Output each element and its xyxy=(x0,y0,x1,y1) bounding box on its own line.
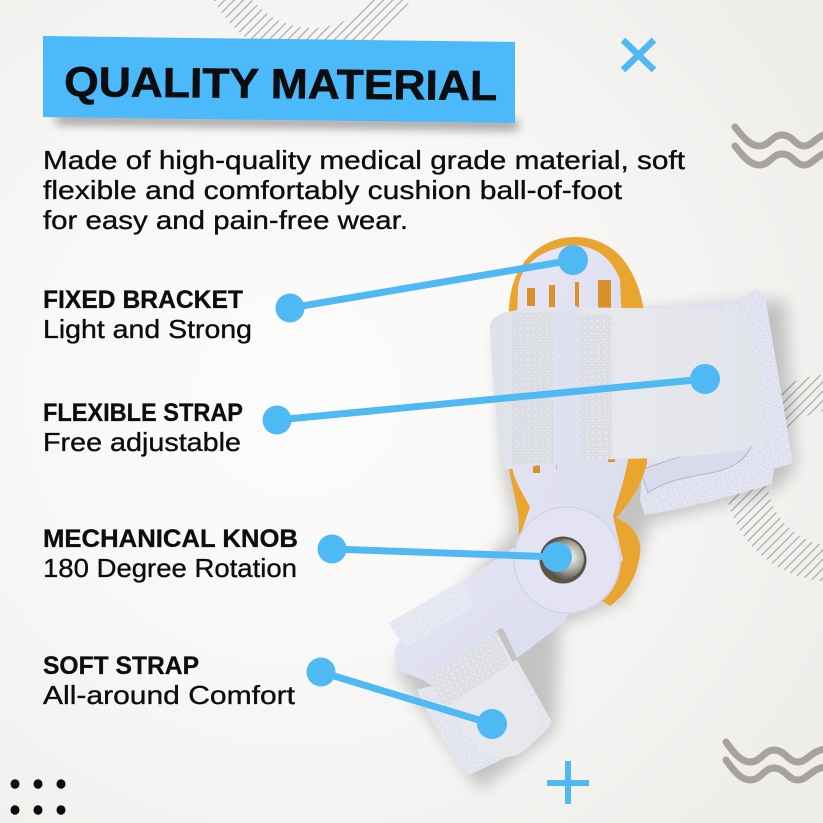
label: mechanical knob: 180 Degree Rotation xyxy=(43,553,297,583)
rear strap fold layer xyxy=(640,445,752,493)
decor: bottom right waves xyxy=(726,742,823,780)
decor: top hatched ring xyxy=(214,0,410,40)
label: flexible strap xyxy=(43,399,243,457)
label: flexible strap: FLEXIBLE STRAP xyxy=(43,399,243,427)
intro paragraph: flexible and comfortably cushion ball-of-foot xyxy=(43,175,623,205)
decor: blue plus xyxy=(547,761,589,804)
bracket centre rail xyxy=(555,306,582,480)
decor: blue cross xyxy=(623,40,654,70)
knob rim xyxy=(514,507,620,613)
title banner xyxy=(43,36,518,130)
strap velcro right xyxy=(577,314,612,459)
strap velcro left xyxy=(512,312,554,464)
bracket slots xyxy=(527,280,615,473)
intro paragraph: for easy and pain-free wear. xyxy=(43,205,408,235)
product photo: toe brace xyxy=(388,237,795,790)
label: fixed bracket xyxy=(43,286,252,344)
intro paragraph: Made of high-quality medical grade material, soft xyxy=(43,145,686,175)
orange pad xyxy=(508,237,647,606)
label: fixed bracket: FIXED BRACKET xyxy=(43,286,243,314)
pointer: flexible strap xyxy=(262,364,720,434)
product shadow xyxy=(395,300,795,790)
decor: right hatched ring xyxy=(727,374,823,581)
lower flap velcro xyxy=(427,632,510,708)
pointer: mechanical knob xyxy=(318,534,572,572)
rear foam strap xyxy=(640,289,793,515)
pointer: fixed bracket xyxy=(276,245,588,322)
label: soft strap xyxy=(43,652,296,710)
metal rivet xyxy=(540,536,586,584)
label: mechanical knob xyxy=(43,525,298,583)
arm velcro tab xyxy=(388,583,473,648)
plastic bracket xyxy=(512,245,628,610)
arm of hinge xyxy=(395,548,575,686)
title: QUALITY MATERIAL xyxy=(64,58,497,109)
knob disc xyxy=(513,506,621,614)
label: mechanical knob: MECHANICAL KNOB xyxy=(43,525,298,553)
pointer: soft strap xyxy=(306,658,507,739)
label: fixed bracket: Light and Strong xyxy=(43,314,252,344)
decor: top right waves xyxy=(735,127,823,165)
front flexible strap xyxy=(490,307,763,470)
decor: black dots xyxy=(10,779,66,815)
label: soft strap: All-around Comfort xyxy=(43,680,296,710)
intro paragraph xyxy=(43,145,686,235)
lower foam strap xyxy=(417,660,552,776)
label: flexible strap: Free adjustable xyxy=(43,427,241,457)
lower strap flap xyxy=(427,632,540,757)
label: soft strap: SOFT STRAP xyxy=(43,652,199,680)
